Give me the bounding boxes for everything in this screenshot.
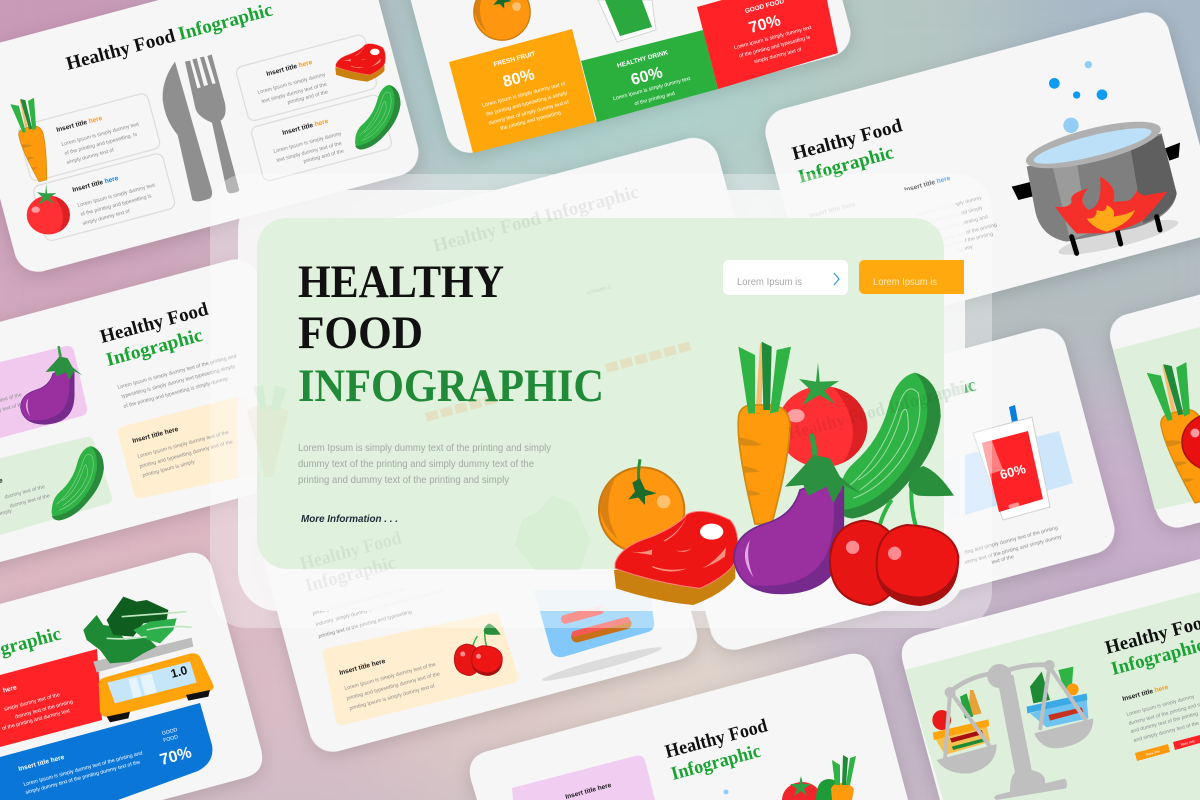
icon: cherries — [830, 466, 958, 605]
panel: healthy drink 60%: 60% — [629, 64, 665, 89]
icon: eggplant — [734, 433, 860, 593]
card: centre slide behind the glass — [309, 132, 772, 464]
box text: cucumber: printing and of the — [303, 148, 345, 165]
ghost slide contents seen through the glass: Healthy Food Infographic — [431, 182, 641, 257]
heading: hero title: HEALTHY — [298, 256, 504, 308]
card 10 text — [1122, 684, 1200, 744]
card 3 text: dummy — [956, 244, 974, 254]
box text: carrot: Lorem Ipsum is simply dummy text — [61, 121, 140, 148]
panel: fresh fruit 80%: 80% — [501, 66, 537, 91]
button: more info orange: More Info — [1145, 749, 1160, 757]
blue band: FOOD — [163, 734, 179, 744]
cream panel — [118, 395, 265, 498]
box text: carrot: of the printing and typesetting. Is — [64, 132, 138, 157]
panel: good food 70% — [697, 0, 838, 89]
box text: cucumber: text simply dummy text of the — [276, 141, 343, 164]
box text: carrot — [56, 115, 140, 166]
scale readout: 1.0 — [169, 663, 189, 681]
card 6 heading: Healthy Food — [98, 299, 211, 348]
box text: carrot: Insert title here — [56, 115, 104, 134]
card 10 text: and dummy text of the printing — [1130, 711, 1199, 735]
blue band: GOOD — [161, 727, 178, 737]
box text: meat: printing and of the — [287, 89, 329, 106]
card 3 text: text of the printing and — [937, 214, 989, 233]
card 5 paragraph: industry. simply dummy text of the printing and typesetting — [315, 588, 445, 628]
hero paragraph: printing and dummy text of the printing and simply — [298, 474, 510, 486]
frosted glass outer frame — [210, 174, 992, 628]
icon: meat — [335, 44, 385, 82]
cream panel with cherries: Insert title here — [339, 658, 386, 677]
heading: hero title: INFOGRAPHIC — [298, 360, 604, 412]
box text: cucumber — [273, 118, 345, 165]
blue band — [0, 703, 212, 800]
card 1 heading: Healthy Food — [64, 25, 178, 75]
icon: juice cup 60%: 60% — [998, 461, 1028, 482]
card 5 paragraph: printing and typesetting dummy text of the — [312, 586, 407, 617]
button: orange lorem ipsum — [859, 260, 964, 294]
card 10 heading — [1103, 610, 1200, 680]
icon: orange — [599, 459, 684, 553]
card 3 text: dummy text of the printing — [938, 222, 998, 243]
card 8 paragraph: dummy text of the printing and simply dummy — [960, 534, 1063, 567]
card 6 heading: Infographic — [104, 325, 205, 371]
panel: good food 70%: Lorem Ipsum is simply dummy text — [733, 25, 813, 51]
ghost slide contents seen through the glass: Healthy Food — [298, 528, 404, 575]
card 8 heading end: graphic — [915, 375, 978, 410]
bubble — [724, 790, 728, 794]
card 3 text: Insert title here — [904, 175, 952, 194]
cream panel with cherries: printing Ipsum is simply dummy text of — [349, 683, 436, 712]
box text: tomato: Insert title here — [72, 175, 120, 194]
green panel — [0, 437, 112, 535]
card 3 heading: Infographic — [796, 142, 896, 188]
box text: tomato: of the printing and typesetting is — [80, 193, 153, 218]
panel: healthy drink 60%: HEALTHY DRINK — [616, 49, 669, 70]
icon: eggplant — [21, 346, 82, 424]
green panel text: dummy text of the — [4, 484, 46, 501]
green panel text: dummy text of the — [9, 493, 51, 510]
panel: fresh fruit 80%: the printing and typesetting — [500, 110, 562, 132]
card: far-right carrot slide — [1105, 212, 1200, 533]
ghost slide contents seen through the glass: Infographic — [303, 552, 398, 597]
heading: hero title — [298, 256, 604, 412]
button: more info red: More Info — [1180, 739, 1195, 747]
blue band behind cup — [930, 431, 1073, 520]
panel: healthy drink 60%: Lorem Ipsum is simply dummy text — [612, 76, 692, 102]
icon: knife and fork — [163, 54, 239, 201]
icon: tomato — [782, 776, 822, 800]
box text: meat: Lorem Ipsum is simply dummy — [257, 72, 327, 96]
button: orange lorem ipsum: Lorem Ipsum is — [873, 276, 937, 288]
ghost heading over the hero illustration: Healthy Food Infographic — [786, 375, 975, 445]
card 6 paragraph: Lorem Ipsum is simply dummy text of the printing and — [117, 353, 237, 391]
icon: steak — [614, 511, 738, 605]
card 10 text: and simply dummy text of the — [1133, 721, 1200, 744]
more information link: More Information . . . — [301, 514, 398, 525]
card 3 text: dummy text of the printing — [934, 231, 994, 252]
cream panel with cherries: Lorem Ipsum is simply dummy text of the — [344, 662, 437, 692]
cream panel text: Insert title here — [132, 426, 179, 445]
card: right juice slide — [657, 323, 1120, 655]
icon: carrot — [831, 755, 856, 800]
hero paragraph — [298, 442, 552, 486]
button: white lorem ipsum — [723, 260, 848, 295]
icon: green drink — [598, 0, 656, 42]
card 3 text: Lorem Ipsum is simply dummy — [913, 195, 983, 219]
panel: good food 70%: simply dummy text of — [753, 47, 803, 65]
red band: dummy text of the printing — [14, 699, 74, 720]
pink panel — [0, 346, 87, 438]
box text: meat: text simply dummy text of the — [261, 82, 328, 105]
card: left eggplant slide — [0, 254, 313, 586]
card 10 text: Insert title here — [1122, 684, 1170, 703]
hero illustration: vegetable group — [599, 342, 958, 605]
card 8 paragraph: text of the — [991, 554, 1015, 566]
panel: fresh fruit 80%: FRESH FRUIT — [493, 51, 536, 68]
card 10 text: Lorem Ipsum is simply dummy — [1126, 694, 1196, 718]
red band: here — [2, 684, 18, 695]
red band: of the printing and dummy text — [2, 708, 71, 732]
green panel — [905, 592, 1200, 800]
heading: hero title: FOOD — [298, 307, 423, 359]
card 6 paragraph: of the printing and typesetting is simply dummy — [123, 376, 229, 410]
blue band: Lorem Ipsum is simply dummy text of the printing and — [23, 750, 143, 788]
panel: fresh fruit 80%: the printing and typesetting is simply — [486, 90, 568, 118]
pink panel text — [0, 392, 26, 417]
panel: fresh fruit 80% — [449, 29, 596, 153]
icon: cucumber slice — [816, 779, 842, 800]
cream panel with cherries — [323, 613, 518, 725]
green panel — [1113, 327, 1200, 510]
button: more info red — [1173, 735, 1200, 750]
panel: fresh fruit 80%: dummy text of simply dummy text of — [488, 99, 570, 127]
panel: healthy drink 60% — [581, 30, 718, 122]
card 11 heading: Infographic — [669, 741, 763, 785]
box text: meat: Insert title here — [266, 59, 314, 78]
icon: balance scale with baskets — [932, 660, 1093, 800]
card: bottom-right balance scale slide — [902, 559, 1200, 800]
card: bottom-centre slide — [470, 654, 908, 800]
box text: meat — [257, 59, 329, 106]
button: more info orange — [1135, 744, 1170, 761]
card 6 heading — [98, 299, 211, 371]
card 3 text: dummy text and simply — [931, 205, 984, 225]
card 3 heading: Healthy Food — [790, 115, 905, 165]
card 6 paragraph — [117, 353, 237, 410]
card: middle-lower cherry slide — [256, 429, 702, 757]
panel: good food 70%: of the printing and typesetting is — [739, 35, 811, 59]
blue band: Insert title here — [18, 754, 65, 773]
card 8 paragraph: rinting and simply dummy text of the printing — [959, 525, 1059, 557]
card 1 heading: Infographic — [176, 0, 275, 45]
icon: cucumber — [355, 85, 400, 150]
card 3 heading — [790, 115, 905, 188]
icon: blue lunch tray with sandwich — [534, 590, 663, 685]
green panel text — [0, 477, 51, 518]
panel: green hero background — [257, 218, 944, 569]
icon: carrot — [738, 342, 791, 524]
card 10 text: dummy text of the printing and si — [1128, 702, 1200, 727]
icon: carrot — [10, 95, 55, 184]
box text: tomato: simply dummy text of — [82, 208, 131, 227]
card: top-middle percentage slide — [393, 0, 856, 158]
icon: orange — [474, 0, 530, 40]
box text: cucumber: Lorem Ipsum is simply dummy — [273, 131, 343, 155]
box text: carrot: simply dummy text of — [66, 147, 115, 166]
card 11 heading: Healthy Food — [663, 715, 770, 763]
hero paragraph: dummy text of the printing and simply dummy text of the — [298, 458, 534, 470]
cream panel text: printing and typesetting dummy text of the — [139, 439, 234, 470]
box text: tomato: Lorem Ipsum is simply dummy text — [77, 182, 156, 209]
card 1 heading — [64, 0, 275, 75]
outlined text boxes — [17, 34, 393, 242]
cream panel text — [132, 426, 234, 479]
cream panel text: printing Ipsum is simply — [142, 459, 196, 479]
blue band: 70% — [158, 744, 194, 769]
blue band: simply dummy text of the printing dummy text of the — [25, 759, 141, 796]
pink panel — [512, 756, 655, 800]
icon: cherry partial — [1182, 413, 1200, 471]
card 6 paragraph: typesetting is simply dummy text typesetting simply — [121, 364, 236, 400]
red band — [0, 649, 102, 747]
card: pot slide — [760, 7, 1200, 339]
hero paragraph: Lorem Ipsum is simply dummy text of the printing and simply — [298, 442, 552, 454]
frosted glass inner panel — [238, 190, 965, 611]
ghost slide contents seen through the glass: Insert title here — [809, 201, 856, 220]
cream panel text: Lorem Ipsum is simply dummy text of the — [137, 430, 230, 460]
card 3 text — [904, 175, 998, 254]
red band: simply dummy text of the — [4, 692, 61, 713]
panel: good food 70%: 70% — [747, 12, 783, 37]
box text: tomato — [72, 175, 156, 227]
card: top-left cutlery slide — [0, 0, 424, 277]
card 11 heading — [663, 715, 770, 785]
box text: cucumber: Insert title here — [282, 118, 330, 137]
cream panel with cherries: printing and typesetting dummy text of the — [346, 671, 441, 702]
icon: cucumber — [52, 446, 104, 520]
icon: kitchen scale with leafy greens — [83, 597, 214, 722]
icon: boiling pot on fire — [1012, 61, 1180, 261]
icon: cucumber — [838, 373, 941, 518]
panel: fresh fruit 80%: Lorem Ipsum is simply dummy text of — [482, 81, 566, 109]
ghost slide contents seen through the glass — [247, 182, 856, 597]
icon: juice cup 60% — [973, 405, 1050, 520]
card: bottom-left kitchen scale slide — [0, 553, 262, 800]
panel: healthy drink 60%: of the printing and — [634, 91, 676, 107]
icon: carrot — [1146, 358, 1200, 506]
button: white lorem ipsum: Lorem Ipsum is — [737, 276, 802, 288]
icon: tomato — [777, 362, 867, 467]
ghost slide contents seen through the glass: VITAMIN C — [586, 284, 613, 297]
card 5 paragraph: printing text of the printing and typesetting — [318, 609, 413, 640]
icon: tomato — [27, 184, 70, 235]
